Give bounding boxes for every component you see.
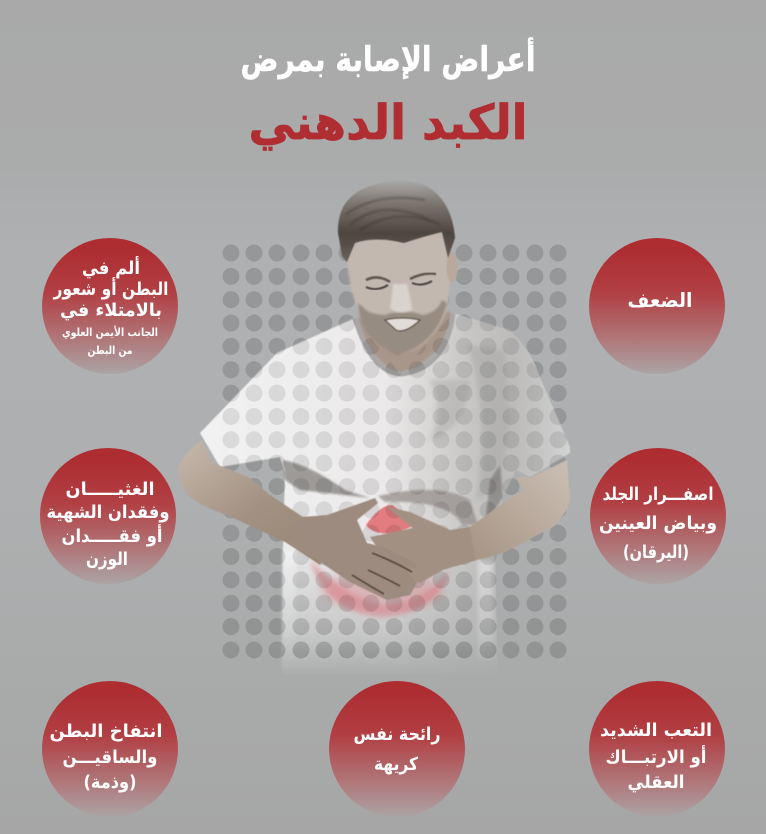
collar [355,313,453,374]
neck [358,300,452,372]
symptom: fatigue: أو الارتبـــاك [606,745,706,768]
symptom: nausea [40,448,176,584]
symptom: abdominal pain: الجانب الأيمن العلوي [62,325,158,339]
symptom: abdominal pain: البطن أو شعور [53,277,168,300]
right hand [370,507,475,583]
symptom: fatigue: التعب الشديد [600,720,712,741]
hair strands [345,198,440,230]
facial features [366,274,436,331]
symptom: jaundice: وبياض العينين [599,513,717,534]
symptom: weakness [589,238,725,374]
symptom: nausea: الغثيـــــان [66,479,154,500]
symptom: jaundice [590,448,726,584]
title: أعراض الإصابة بمرض [240,37,536,80]
finger creases [352,553,412,594]
symptom: abdominal pain: بالامتلاء في [60,300,162,321]
symptom: bad breath: كريهة [374,754,418,775]
right ear [446,252,458,282]
left hand [287,498,417,600]
abdominal redness [310,560,450,617]
symptom: abdominal pain: ألم في [82,256,140,279]
hair [338,181,455,262]
symptom: nausea: وفقدان الشهية [46,502,170,523]
face [346,222,450,354]
shirt [200,313,570,675]
symptom: swelling: انتفاخ البطن [50,721,162,742]
symptom: swelling: والساقيـــن [62,747,158,768]
symptom: nausea: أو فقـــــدان [62,524,162,547]
illustration: man holding his abdomen [178,181,570,675]
symptom: fatigue [589,681,725,817]
symptom: bad breath: رائحة نفس [354,724,440,745]
right arm [455,460,570,566]
symptom: jaundice: (اليرقان) [623,542,689,563]
symptom: jaundice: اصفـــرار الجلد [602,484,714,505]
dots on shirt [222,316,566,658]
subtitle: الكبد الدهني [248,95,528,151]
symptom: bad breath [329,681,465,817]
left arm [178,440,345,565]
symptom: abdominal pain [42,238,178,374]
dot pattern [222,244,566,658]
symptom: weakness: الضعف [628,288,692,312]
symptom: abdominal pain: من البطن [88,344,132,357]
symptom: nausea: الوزن [86,549,128,570]
symptom: swelling [42,681,178,817]
symptom: swelling: (وذمة) [84,772,136,793]
symptom: fatigue: العقلي [628,772,684,793]
beard [358,300,447,355]
